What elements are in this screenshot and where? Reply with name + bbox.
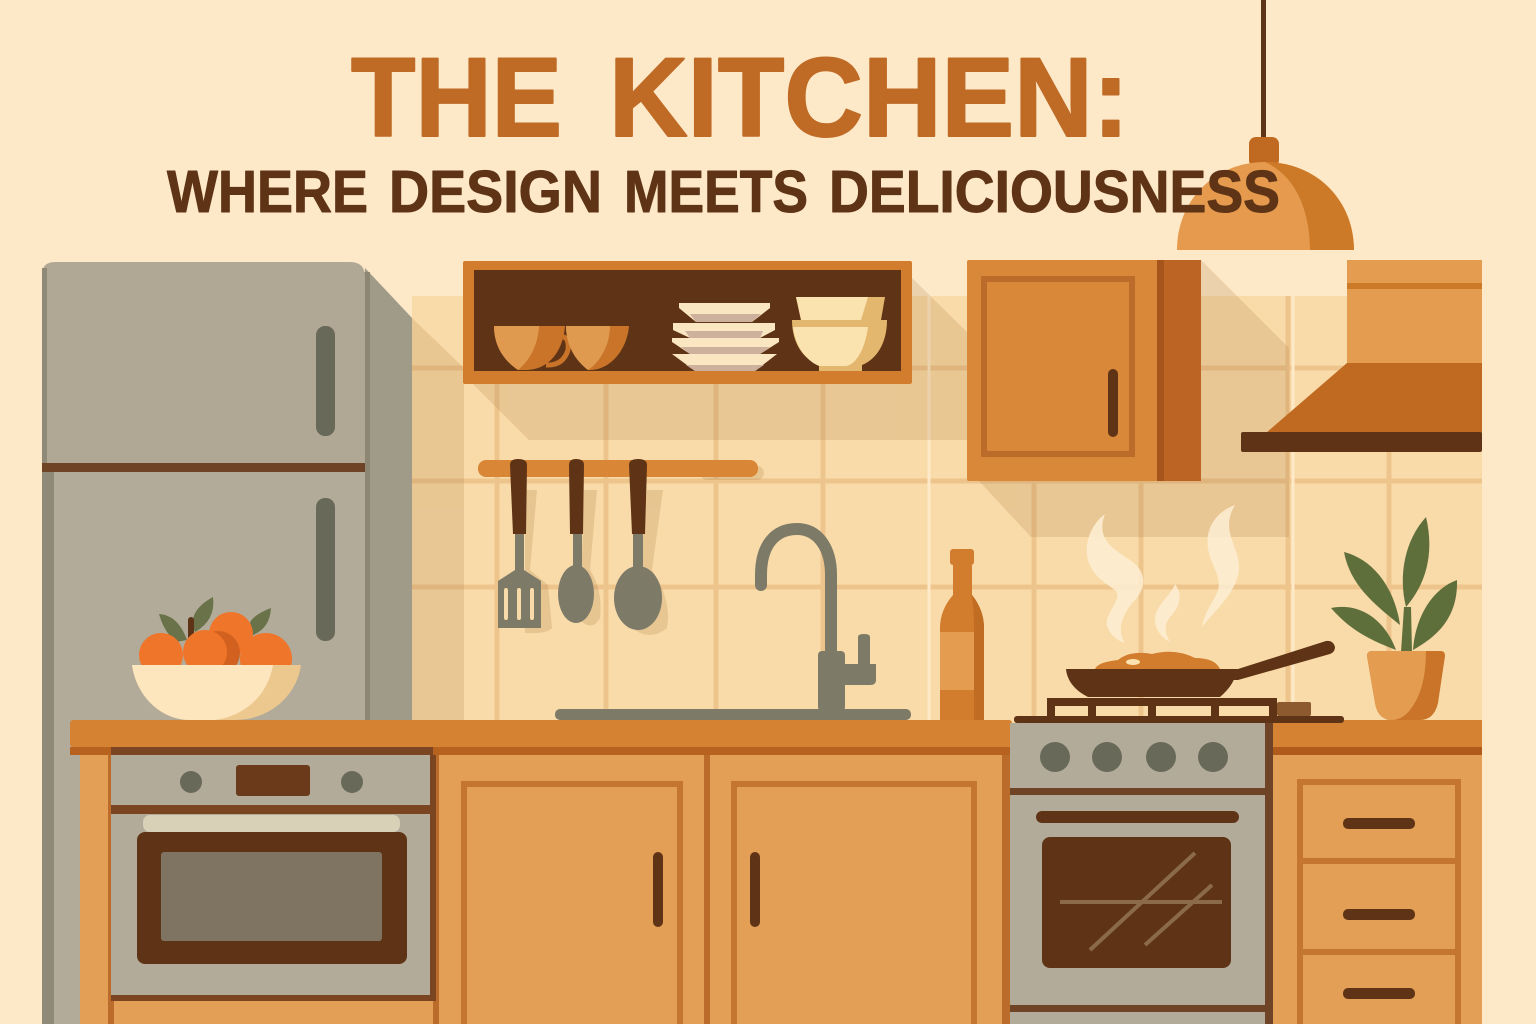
upper cabinet [967, 260, 1201, 481]
burner grate [1014, 698, 1344, 723]
bowl of oranges [132, 597, 301, 720]
potted plant [1331, 517, 1457, 720]
counter [70, 720, 1482, 755]
base cabinets [80, 755, 1482, 1024]
pendant lamp [1177, 0, 1354, 250]
stacked plates [672, 303, 779, 371]
range hood [1241, 260, 1482, 452]
faucet [761, 529, 876, 711]
title: DESIGN [389, 159, 602, 225]
title: DELICIOUSNESS [829, 159, 1280, 225]
drawers [1273, 755, 1482, 1024]
title: MEETS [624, 159, 808, 225]
ladle [614, 459, 662, 630]
refrigerator [42, 262, 412, 1024]
sink [555, 709, 911, 720]
utensil rail [478, 459, 764, 635]
tiled wall [412, 260, 1482, 726]
frying pan [1066, 641, 1335, 697]
cups [494, 326, 629, 370]
oil bottle [940, 549, 984, 720]
stove [1010, 720, 1273, 1024]
steam [1087, 505, 1239, 643]
title: KITCHEN: [609, 35, 1129, 160]
title: WHERE [167, 159, 368, 225]
built-in oven [108, 747, 436, 1024]
bowls [792, 297, 887, 371]
spatula [498, 459, 541, 628]
open shelf [463, 261, 912, 384]
title: THE [351, 35, 562, 160]
spoon [558, 459, 594, 623]
title [167, 35, 1280, 225]
